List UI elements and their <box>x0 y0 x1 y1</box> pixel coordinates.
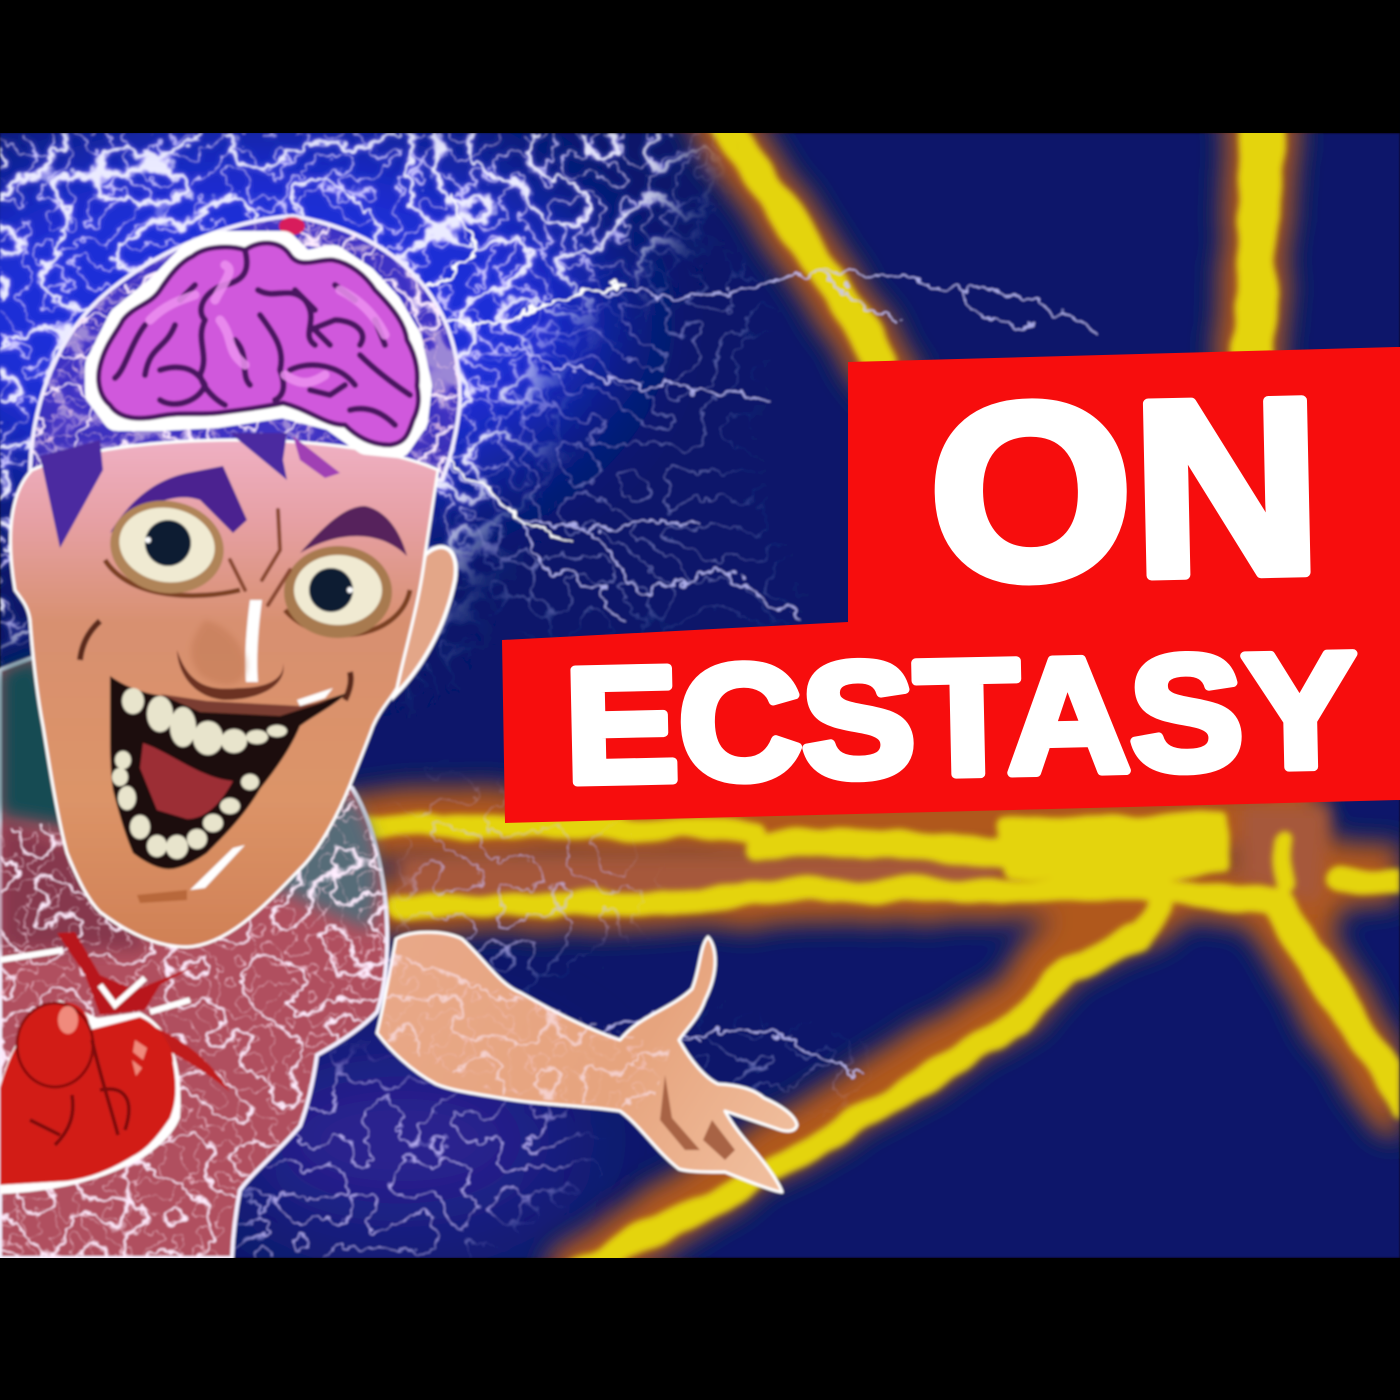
brown nerve body <box>400 855 1000 905</box>
heading: ON: ON <box>926 346 1324 633</box>
lower teeth <box>112 751 259 859</box>
heart body <box>0 1003 176 1185</box>
nose highlight <box>245 600 262 682</box>
lightning near hand <box>700 1030 850 1090</box>
eye socket shadows <box>105 560 410 635</box>
purple glow behind body <box>220 1040 580 1240</box>
face <box>10 440 438 947</box>
lip shadow <box>160 694 330 716</box>
lightning below body <box>220 1060 590 1270</box>
nerve core lines <box>362 115 1400 1272</box>
heart left lobe <box>17 1003 93 1087</box>
blue glow behind head <box>0 120 610 520</box>
cheek creases <box>80 621 351 700</box>
eye right <box>284 546 392 638</box>
yellow nerve fibres <box>362 100 1400 1272</box>
forehead creases <box>230 510 290 605</box>
red banner <box>502 347 1400 823</box>
torso dark upper shade <box>0 820 150 950</box>
purple hair strokes <box>40 433 287 548</box>
mouth <box>110 676 347 869</box>
lightning, sparse outer zone <box>460 280 780 620</box>
heading: ECSTASY: ECSTASY <box>563 618 1359 817</box>
nose bridge tone <box>191 620 246 685</box>
heart <box>0 932 230 1194</box>
lightning tendrils <box>430 200 1100 1075</box>
chin highlight <box>190 845 245 890</box>
nerve glow <box>365 100 1400 1270</box>
shirt teal, right <box>255 792 378 930</box>
chin crease <box>137 890 187 903</box>
heart veins <box>30 1040 129 1145</box>
shirt teal, left <box>0 656 90 830</box>
torso <box>0 655 389 1258</box>
nose shadow <box>177 650 284 700</box>
scalp band <box>30 216 460 480</box>
brain <box>99 243 418 445</box>
vessel white highlights <box>0 950 190 1012</box>
eyebrow right <box>300 506 407 556</box>
heart gloss <box>58 1006 78 1034</box>
ear right <box>395 547 456 695</box>
character <box>0 216 797 1258</box>
lightning over nerve band <box>410 790 650 980</box>
lip highlight <box>297 688 333 706</box>
arm <box>377 932 797 1192</box>
eyebrow left <box>110 466 247 533</box>
eye left <box>103 492 231 602</box>
tongue <box>140 743 233 819</box>
head <box>10 216 460 947</box>
red spot on scalp <box>279 217 305 235</box>
torso veins <box>0 780 389 1258</box>
arm veins <box>385 950 670 1110</box>
heart vessels <box>57 932 197 1015</box>
brain folds <box>115 250 410 425</box>
hand shading <box>660 1075 735 1160</box>
title banner <box>502 346 1400 823</box>
lightning around head <box>0 100 700 660</box>
heart white outline <box>0 1000 181 1194</box>
brain highlights <box>150 265 385 382</box>
scalp veins <box>30 216 460 480</box>
upper teeth <box>122 688 287 755</box>
